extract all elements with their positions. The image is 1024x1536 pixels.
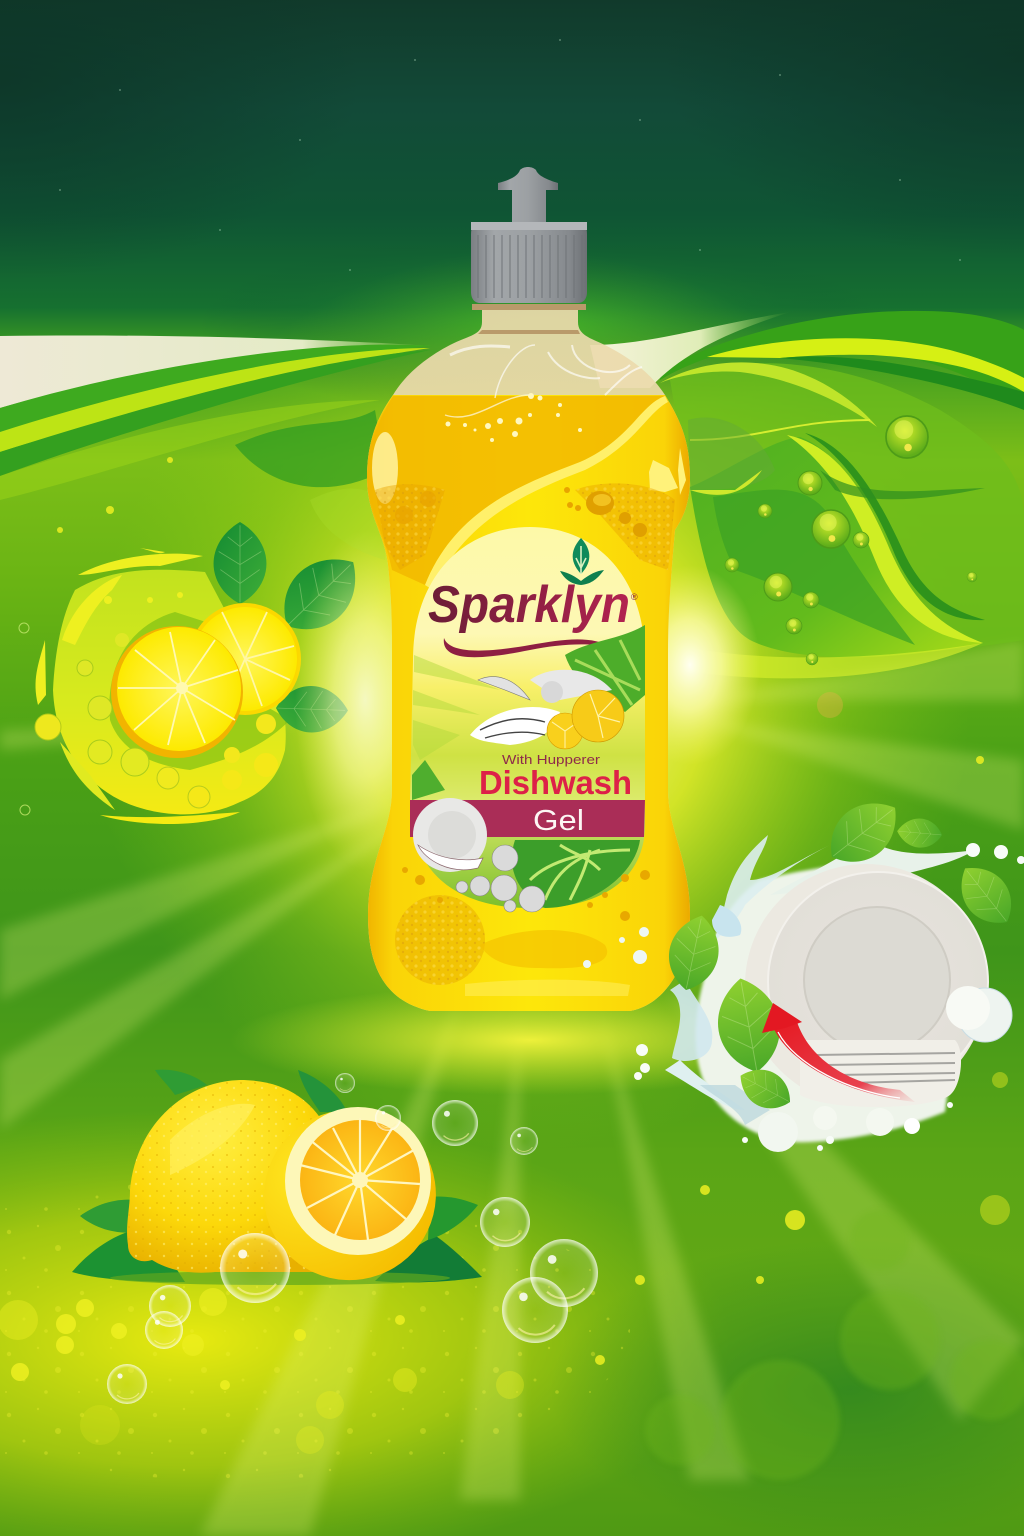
bottle body [367,308,690,1011]
label variant: Gel [533,805,584,837]
label silver balls [456,845,545,912]
water droplets on leaves [725,416,977,665]
foam droplets [634,843,1024,1151]
glass swirl lines [445,345,642,417]
red arrow [762,1003,915,1102]
cream swoosh: left [0,335,432,408]
amber gel swirl [480,930,607,968]
cream swoosh: right [590,312,790,388]
dishes with water splash [634,787,1024,1152]
gel swirl highlight [425,396,668,590]
neck ring [472,304,586,334]
textured gel sphere [395,895,485,985]
lower bubbles in gel [402,867,650,921]
logo leaf icon [560,538,604,585]
orange foam right [564,483,675,570]
label band [410,800,645,837]
brand name: Sparklyn [428,576,630,634]
label [410,527,645,912]
green wave: right [660,311,1024,410]
botanical splash art [470,625,645,745]
lemon slices [111,603,301,758]
small white bubbles in gel [446,393,582,442]
lemon leaves top-left group [214,522,374,734]
ground shadow [110,1271,450,1285]
label plate [413,798,487,872]
big leaves upper right [660,362,1024,678]
lemon splash swirl [35,548,290,824]
label rays [413,655,500,760]
gel amber upper band [368,396,665,585]
brand swoosh [444,638,615,657]
plates [745,864,1012,1107]
green wave: left [0,345,432,500]
orange foam left [375,484,445,570]
cut lemon [240,1086,460,1304]
halo behind bottle [230,530,830,1095]
dust specks on dark top [59,39,961,271]
label palm leaves [512,840,640,908]
scattered yellow droplets [0,457,1010,1454]
whole lemon [127,1080,335,1273]
registered mark: ® [631,592,638,602]
base highlight [465,980,630,996]
whole and cut lemons [72,1070,482,1304]
soap bubbles [107,1073,598,1404]
gel fill [367,395,690,1011]
left side highlight [372,432,398,504]
leaves around plates [662,787,1024,1118]
right side highlight [649,448,686,495]
label lemons [547,690,624,749]
light rays [0,640,1024,1536]
lemon leaves bottom [72,1070,482,1282]
label product name: Dishwash [479,764,632,801]
soft bokeh lower right [645,1210,1024,1480]
big leaf upper left [235,410,385,560]
water splash [665,835,975,1152]
bottle [367,167,690,1011]
bottle cap [471,167,587,303]
label tagline: With Hupperer [502,752,601,767]
